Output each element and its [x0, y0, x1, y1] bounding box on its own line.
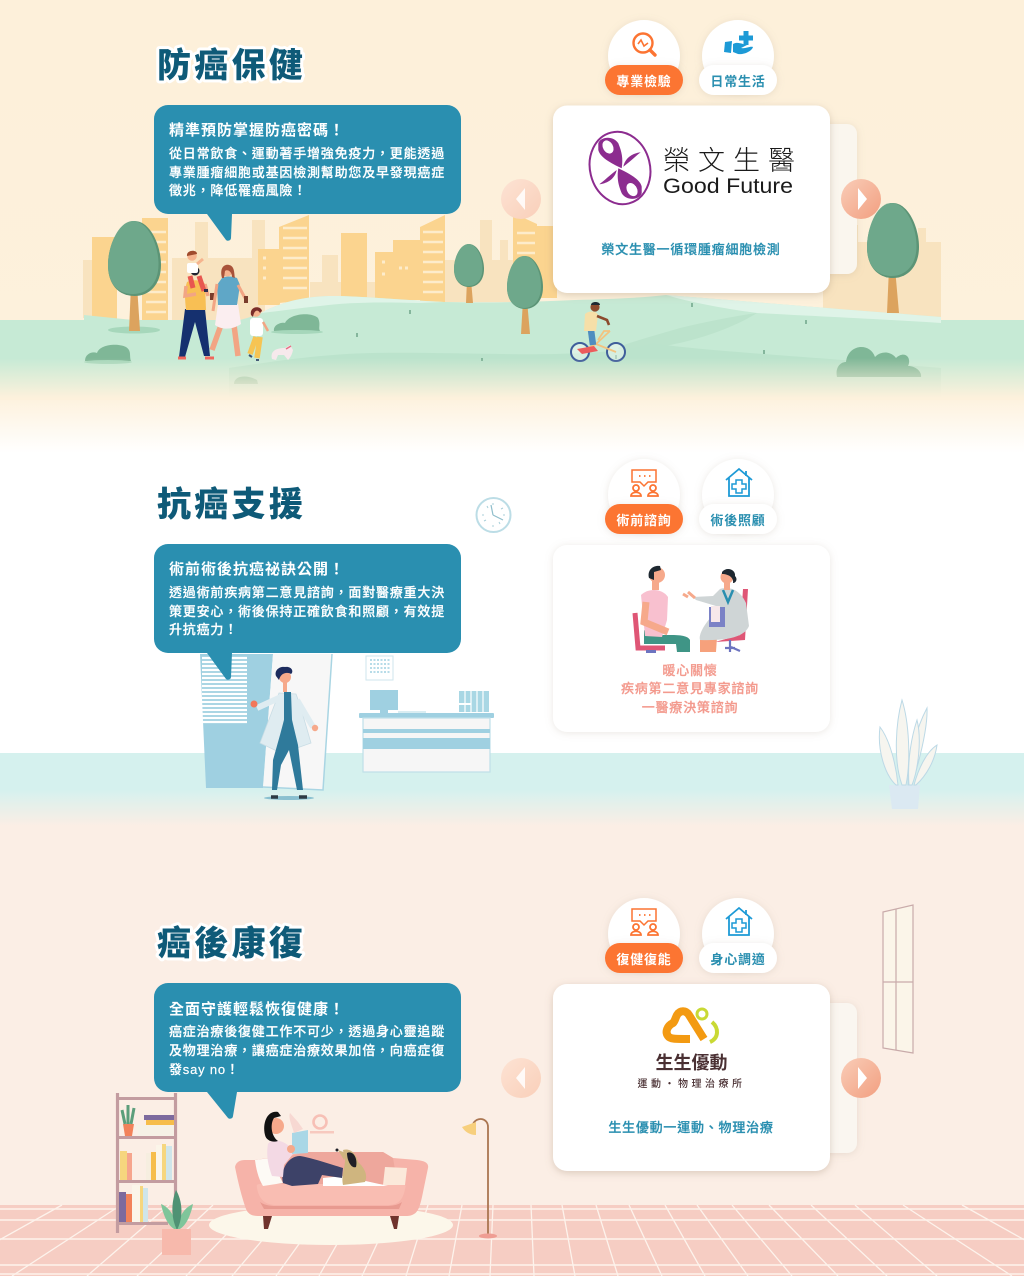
tab: 術後照顧 — [699, 459, 777, 534]
ground and hills — [0, 295, 1024, 400]
logo: 生生優動: 生生優動 — [656, 1053, 728, 1073]
back card — [800, 124, 857, 274]
floor plant — [161, 1190, 193, 1255]
main card — [553, 106, 830, 293]
speech bubble: 透過術前疾病第二意見諮詢，面對醫療重大決 — [169, 585, 445, 600]
illustration: doctor consulting patient — [635, 566, 749, 653]
tab: 專業檢驗: 專業檢驗 — [616, 74, 672, 89]
speech bubble: 從日常飲食、運動著手增強免疫力，更能透過 — [169, 146, 445, 161]
speech bubble — [154, 105, 461, 241]
speech bubble: 全面守護輕鬆恢復健康！ — [169, 1000, 345, 1018]
arrow: next — [841, 1058, 881, 1098]
caption: 榮文生醫一循環腫瘤細胞檢測 — [601, 242, 781, 257]
logo: 榮文生醫 Good Future: 榮文生醫 — [663, 146, 803, 176]
logo: 榮文生醫 Good Future — [582, 125, 803, 211]
tab: 術後照顧: 術後照顧 — [710, 513, 766, 528]
tab: 日常生活 — [699, 20, 777, 95]
logo: 榮文生醫 Good Future: Good Future — [663, 175, 793, 198]
illustration: city park scene — [0, 203, 1024, 400]
tab: 身心調適 — [699, 898, 777, 973]
cushions — [255, 1158, 407, 1186]
caption: 疾病第二意見專家諮詢 — [621, 681, 759, 696]
woman reading — [264, 1112, 343, 1186]
cyclist — [571, 302, 625, 361]
door and window — [200, 654, 332, 790]
teal floor — [0, 753, 1024, 826]
calendar — [366, 656, 393, 680]
illustration: clinic room — [0, 498, 1024, 826]
speech bubble — [154, 544, 461, 680]
tab: 日常生活: 日常生活 — [710, 74, 766, 89]
speech bubble: 癌症治療後復健工作不可少，透過身心靈追蹤 — [169, 1024, 445, 1039]
speech bubble: 精準預防掌握防癌密碼！ — [169, 121, 345, 139]
dog — [336, 1148, 366, 1185]
speech bubble: 術前術後抗癌祕訣公開！ — [169, 560, 345, 578]
arrow: previous — [501, 179, 541, 219]
speech bubble: 策更安心，術後保持正確飲食和照顧，有效提 — [169, 604, 445, 619]
heading: 抗癌支援 — [157, 485, 306, 524]
logo: 生生優動 — [638, 1009, 746, 1090]
arrow: next — [841, 179, 881, 219]
caption — [621, 663, 759, 715]
illustration: living room — [0, 905, 1024, 1276]
ground fade — [0, 358, 1024, 400]
arrow: previous — [501, 1058, 541, 1098]
wall clock — [476, 498, 510, 532]
section: 防癌保健 — [154, 20, 881, 293]
tab: 復健復能: 復健復能 — [616, 952, 672, 967]
tiled floor — [0, 1205, 1024, 1276]
window — [883, 905, 913, 1053]
section: 抗癌支援 — [154, 459, 830, 732]
tab: 術前諮詢 — [605, 459, 683, 534]
rug — [209, 1205, 453, 1245]
speech bubble: 發say no！ — [169, 1062, 240, 1077]
back card — [800, 1003, 857, 1153]
reception desk — [359, 690, 494, 772]
caption: 生生優動一運動、物理治療 — [608, 1120, 774, 1135]
bookshelf — [117, 1093, 177, 1233]
speech bubble: 徵兆，降低罹癌風險！ — [169, 183, 307, 198]
main card — [553, 984, 830, 1171]
bushes — [84, 314, 921, 384]
tab: 術前諮詢: 術前諮詢 — [616, 513, 672, 528]
speech bubble: 升抗癌力！ — [169, 622, 238, 637]
heading: 防癌保健 — [157, 46, 306, 85]
trees — [108, 203, 919, 334]
section: 癌後康復 — [154, 898, 881, 1171]
sofa — [235, 1152, 428, 1229]
logo: 生生優動: 運動・物理治療所 — [638, 1077, 746, 1090]
caption: 一醫療決策諮詢 — [642, 700, 738, 715]
family with dog — [178, 251, 293, 360]
potted plant — [879, 700, 937, 809]
heading: 癌後康復 — [157, 924, 306, 963]
speech bubble — [154, 983, 461, 1119]
tab: 專業檢驗 — [605, 20, 683, 95]
floor lamp — [462, 1119, 497, 1238]
tab: 身心調適: 身心調適 — [710, 952, 766, 967]
caption: 暖心關懷 — [662, 663, 718, 678]
tab: 復健復能 — [605, 898, 683, 973]
speech bubble: 專業腫瘤細胞或基因檢測幫助您及早發現癌症 — [169, 165, 445, 180]
doctor — [250, 667, 318, 800]
speech bubble: 及物理治療，讓癌症治療效果加倍，向癌症復 — [169, 1043, 445, 1058]
wall decor — [310, 1116, 334, 1134]
main card — [553, 545, 830, 732]
city skyline — [83, 213, 941, 324]
